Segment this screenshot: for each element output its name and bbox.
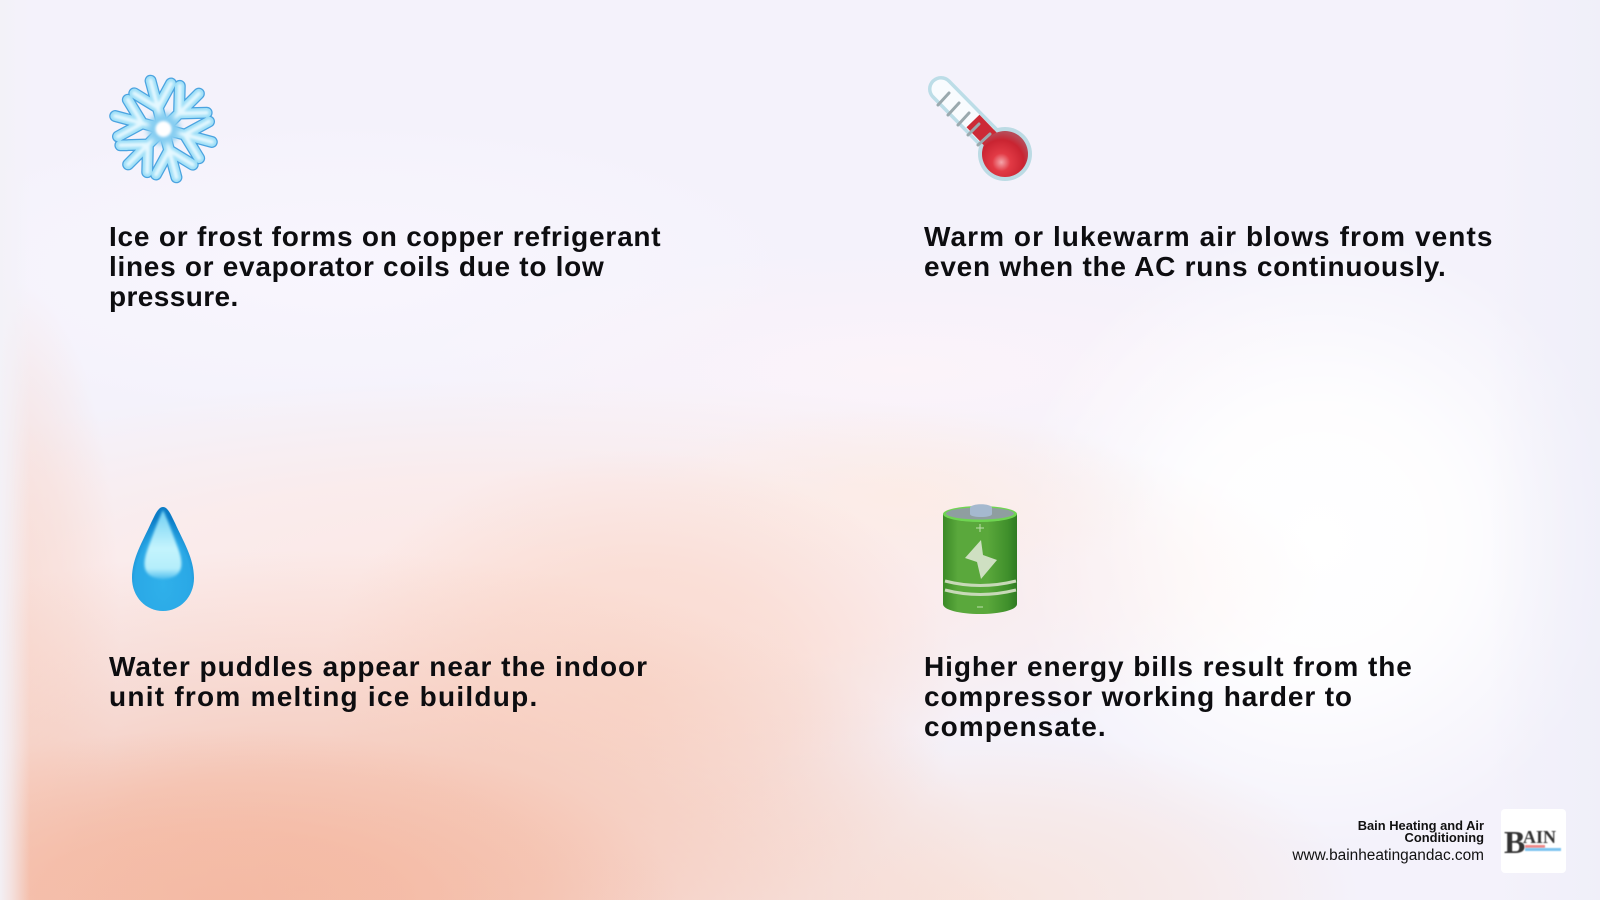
footer company text: Conditioning: [1405, 830, 1484, 845]
logo card: B: [1504, 824, 1525, 860]
text: ice or frost: Ice or frost forms on copper refrigerant: [109, 221, 661, 252]
text: water puddles: unit from melting ice buildup.: [109, 681, 538, 712]
text: warm air: even when the AC runs continuously.: [924, 251, 1447, 282]
text: warm air: [924, 221, 1494, 282]
logo card: [1501, 809, 1566, 873]
footer company text: Bain Heating and Air: [1358, 818, 1484, 833]
text: energy bills: compensate.: [924, 711, 1107, 742]
logo card: AIN: [1523, 827, 1556, 847]
text: water puddles: [109, 651, 648, 712]
text: ice or frost: pressure.: [109, 281, 239, 312]
text: energy bills: [924, 651, 1413, 742]
text: ice or frost: lines or evaporator coils due to low: [109, 251, 604, 282]
text: warm air: Warm or lukewarm air blows from vents: [924, 221, 1494, 252]
text: energy bills: compressor working harder to: [924, 681, 1353, 712]
text: ice or frost: [109, 221, 661, 312]
footer company text: [1292, 818, 1484, 864]
footer company text: www.bainheatingandac.com: [1292, 847, 1484, 864]
text: water puddles: Water puddles appear near the indoor: [109, 651, 648, 682]
text: energy bills: Higher energy bills result from the: [924, 651, 1413, 682]
